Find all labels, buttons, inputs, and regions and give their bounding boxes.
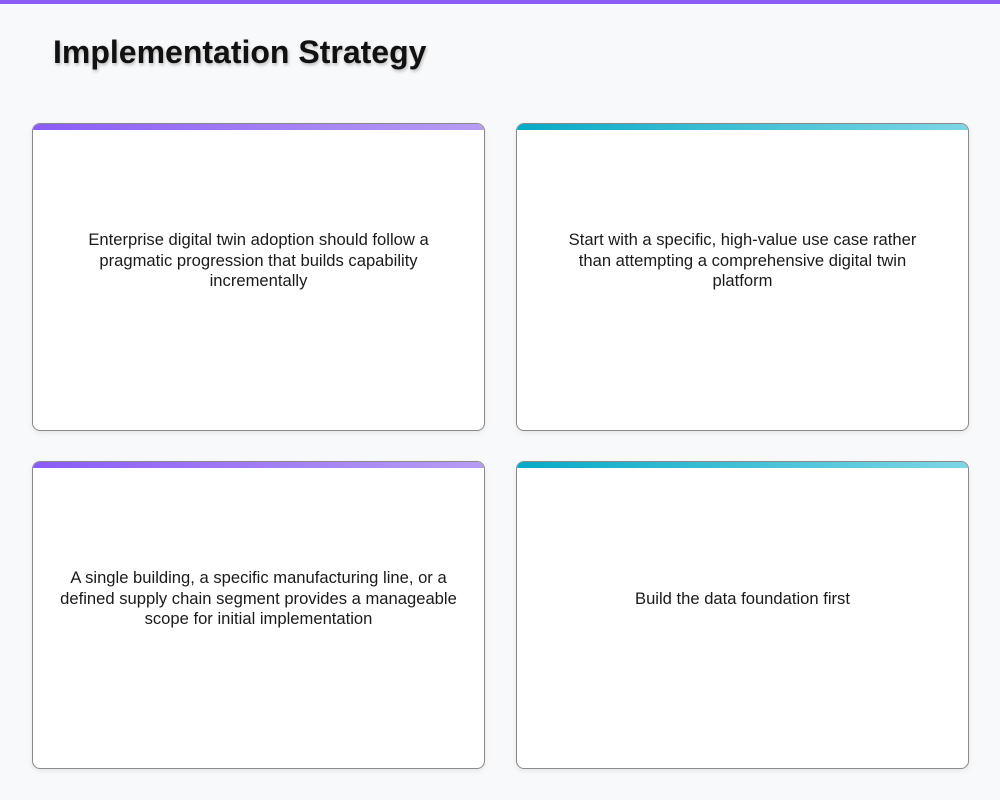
text: data foundation: Build the data foundation first	[635, 589, 850, 608]
title: Implementation Strategy	[53, 34, 426, 70]
text: scope: A single building, a specific manufacturing line, or a defined supply chain segment provides a manageable scope for initial implementation	[60, 568, 457, 628]
panel: use case	[516, 123, 969, 431]
panel: data foundation	[516, 461, 969, 769]
panel: progression	[32, 123, 485, 431]
text: progression: Enterprise digital twin adoption should follow a pragmatic progression that builds capability incrementally	[88, 230, 429, 290]
panel: scope	[32, 461, 485, 769]
text: use case: Start with a specific, high-value use case rather than attempting a comprehensive digital twin platform	[569, 230, 916, 290]
